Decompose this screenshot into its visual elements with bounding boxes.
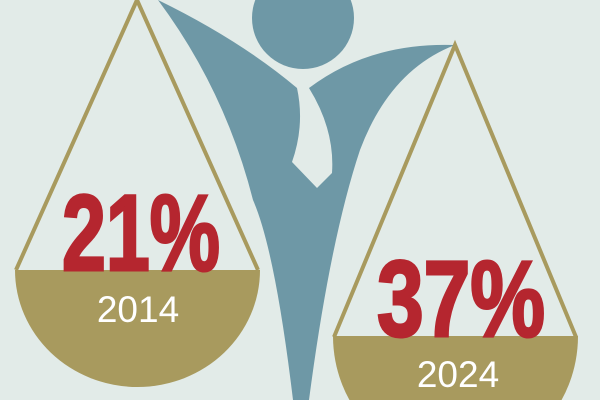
value 37%: 37% [377,238,545,359]
strings [16,0,258,270]
right scale pan 2024 [333,45,578,400]
left scale pan 2014 [15,0,260,387]
body and arms [158,0,455,400]
label 2024: 2024 [417,354,499,395]
pan [333,336,578,400]
strings [334,45,576,337]
head [252,0,354,69]
pan [15,270,260,387]
value 21%: 21% [62,172,220,293]
tie [292,88,332,188]
figure: businessman [158,0,455,400]
label 2014: 2014 [97,289,179,330]
